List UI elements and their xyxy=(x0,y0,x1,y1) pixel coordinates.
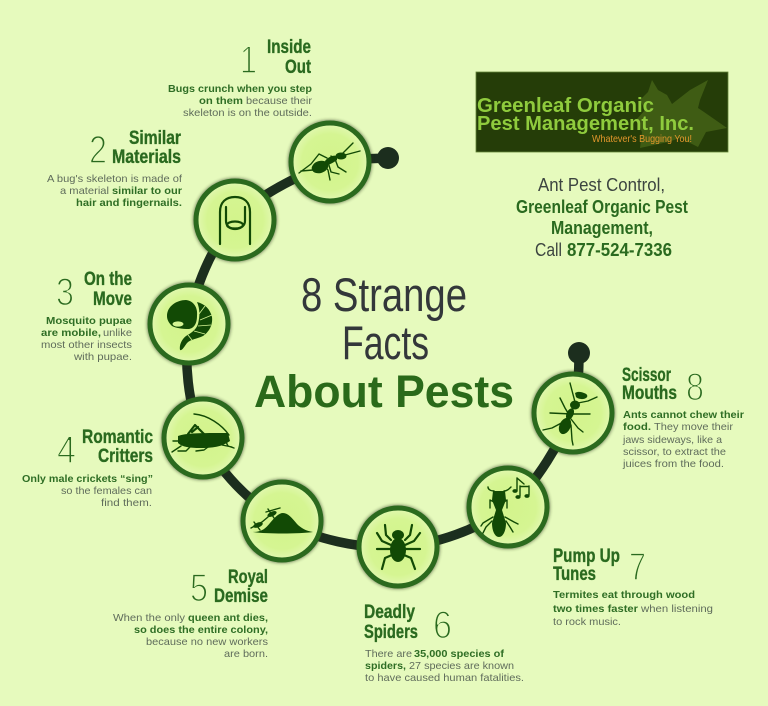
fact 7: pump up tunes: Termites eat through wood xyxy=(553,589,695,601)
fact 3: on the move xyxy=(41,268,132,363)
timeline connector xyxy=(187,147,590,547)
fact 7: pump up tunes: two times faster xyxy=(553,603,638,615)
fact 1: inside out: Bugs crunch when you step xyxy=(168,83,312,95)
fact 2: similar materials: a material xyxy=(60,185,109,197)
fact 3: on the move: are mobile, xyxy=(41,327,101,339)
fact 3: on the move: On the xyxy=(84,268,132,290)
fact 8: scissor mouths xyxy=(622,364,744,470)
company logo: Greenleaf Organic xyxy=(477,94,654,117)
fact 1: inside out: 1 xyxy=(240,39,257,82)
fact 5: royal demise: 5 xyxy=(190,567,208,610)
fact 5: royal demise: are born. xyxy=(224,648,268,660)
fact 5: royal demise: Demise xyxy=(214,585,268,607)
fact 3: on the move: 3 xyxy=(56,271,74,314)
fact 8: scissor mouths: scissor, to extract the xyxy=(623,446,726,458)
fact 1: inside out: skeleton is on the outside. xyxy=(183,107,312,119)
fact 4: romantic critters: 4 xyxy=(57,429,76,472)
fact 8: scissor mouths: juices from the food. xyxy=(622,458,724,470)
icon: termite with music notes xyxy=(466,465,550,549)
fact 5: royal demise xyxy=(113,566,268,660)
fact 8: scissor mouths: They move their xyxy=(654,421,734,433)
fact 5: royal demise: Royal xyxy=(228,566,268,588)
fact 1: inside out: Out xyxy=(285,56,311,78)
fact 3: on the move: Move xyxy=(93,288,132,310)
fact 7: pump up tunes: Tunes xyxy=(553,563,596,585)
fact 6: deadly spiders: 6 xyxy=(433,604,452,647)
fact 4: romantic critters: so the females can xyxy=(61,485,152,497)
fact 2: similar materials: similar to our xyxy=(112,185,182,197)
company logo: Pest Management, Inc. xyxy=(477,112,694,135)
fact 6: deadly spiders xyxy=(364,601,524,684)
title: About Pests xyxy=(254,366,514,417)
title: Facts xyxy=(342,316,429,369)
fact 6: deadly spiders: Spiders xyxy=(364,621,418,643)
fact 8: scissor mouths: food. xyxy=(623,421,651,433)
call to action text: Management, xyxy=(551,218,653,238)
company logo xyxy=(476,72,728,152)
fact 1: inside out: Inside xyxy=(267,36,311,58)
fact 7: pump up tunes: when listening xyxy=(640,603,713,615)
call to action text xyxy=(516,175,688,260)
fact 1: inside out xyxy=(168,36,313,119)
icon: fingernail xyxy=(193,178,277,262)
fact 5: royal demise: When the only xyxy=(113,612,186,624)
fact 1: inside out: because their xyxy=(246,95,313,107)
fact 2: similar materials: Similar xyxy=(129,127,181,149)
fact 7: pump up tunes xyxy=(553,545,713,628)
fact 6: deadly spiders: There are xyxy=(365,648,412,660)
call to action text: Ant Pest Control, xyxy=(538,175,665,195)
icon: spider xyxy=(356,505,440,589)
icon: mosquito pupa xyxy=(147,282,231,366)
fact 6: deadly spiders: 35,000 species of xyxy=(414,648,505,660)
fact 2: similar materials: 2 xyxy=(89,129,107,172)
call to action text: 877-524-7336 xyxy=(567,240,672,260)
fact 6: deadly spiders: Deadly xyxy=(364,601,415,623)
fact 4: romantic critters: Only male crickets “sing” xyxy=(22,473,153,485)
fact 3: on the move: Mosquito pupae xyxy=(46,315,132,327)
fact 2: similar materials: Materials xyxy=(112,146,181,168)
fact 5: royal demise: so does the entire colony, xyxy=(134,624,268,636)
icon: ant carrying food xyxy=(531,371,615,455)
fact 6: deadly spiders: spiders, xyxy=(365,660,406,672)
title xyxy=(254,268,514,417)
fact 6: deadly spiders: to have caused human fatalities. xyxy=(365,672,524,684)
fact 3: on the move: unlike xyxy=(103,327,132,339)
fact 7: pump up tunes: Pump Up xyxy=(553,545,620,567)
fact 4: romantic critters: find them. xyxy=(101,497,152,509)
fact 5: royal demise: queen ant dies, xyxy=(188,612,268,624)
fact 5: royal demise: because no new workers xyxy=(146,636,268,648)
company logo: Whatever's Bugging You! xyxy=(592,133,692,145)
fact 2: similar materials xyxy=(47,127,182,209)
fact 6: deadly spiders: 27 species are known xyxy=(409,660,514,672)
icon: cricket xyxy=(161,396,245,480)
fact 8: scissor mouths: 8 xyxy=(686,366,704,409)
fact 7: pump up tunes: to rock music. xyxy=(553,616,621,628)
fact 8: scissor mouths: Ants cannot chew their xyxy=(623,409,744,421)
fact 4: romantic critters: Critters xyxy=(98,445,153,467)
icon: ant xyxy=(288,120,372,204)
fact 3: on the move: most other insects xyxy=(41,339,132,351)
fact 3: on the move: with pupae. xyxy=(73,351,132,363)
fact 8: scissor mouths: Mouths xyxy=(622,382,677,404)
fact 4: romantic critters xyxy=(22,426,153,509)
fact 4: romantic critters: Romantic xyxy=(82,426,153,448)
call to action text: Greenleaf Organic Pest xyxy=(516,197,688,217)
fact 8: scissor mouths: Scissor xyxy=(622,364,671,386)
title: 8 Strange xyxy=(301,268,467,321)
icon: ant hill xyxy=(240,479,324,563)
fact 1: inside out: on them xyxy=(199,95,243,107)
fact 2: similar materials: A bug's skeleton is made of xyxy=(47,173,182,185)
fact 7: pump up tunes: 7 xyxy=(629,546,646,589)
call to action text: Call xyxy=(535,240,562,260)
fact 8: scissor mouths: jaws sideways, like a xyxy=(622,434,722,446)
fact 2: similar materials: hair and fingernails. xyxy=(76,197,182,209)
